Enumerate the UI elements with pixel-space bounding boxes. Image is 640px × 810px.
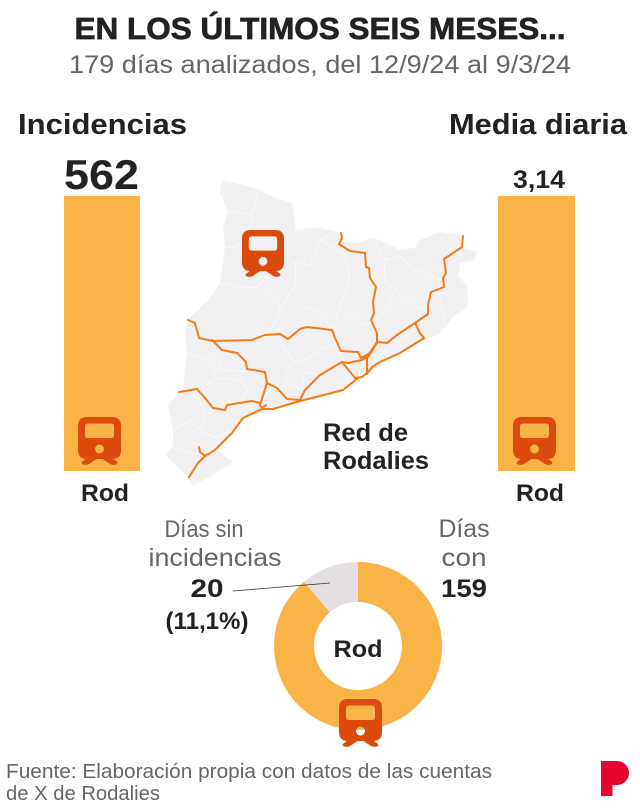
donut: días con incidencias — [274, 562, 442, 730]
icon: map train — [242, 230, 284, 277]
bar label: Rod — [81, 480, 129, 507]
bar: Rod media — [498, 196, 575, 471]
map: red de Rodalies — [165, 180, 477, 485]
map: rail lines — [179, 233, 463, 477]
label: días sin incidencias — [148, 516, 282, 635]
heading: media diaria: Media diaria — [449, 109, 628, 141]
label: días sin incidencias: 20 — [190, 575, 224, 603]
panel: media diaria — [449, 109, 628, 507]
source note: Fuente: Elaboración propia con datos de las cuentas — [6, 761, 492, 783]
label: días sin incidencias: (11,1%) — [166, 608, 248, 635]
donut chart — [274, 562, 442, 747]
map label — [323, 419, 429, 475]
source note — [6, 761, 492, 805]
label: días con: Días — [438, 515, 490, 543]
logo — [601, 761, 629, 796]
donut center label: Rod — [334, 636, 382, 663]
source note: de X de Rodalies — [6, 783, 160, 805]
map: comarca borders — [173, 189, 445, 455]
label: días con: 159 — [441, 575, 487, 603]
title: EN LOS ÚLTIMOS SEIS MESES... — [74, 10, 566, 46]
label: días con: con — [442, 544, 486, 572]
map label: Red de — [323, 419, 408, 447]
map label: Rodalies — [323, 447, 429, 475]
value: 562: 562 — [64, 151, 139, 198]
label: días con — [438, 515, 490, 603]
icon: train — [339, 699, 382, 747]
bar label: Rod — [516, 480, 564, 507]
icon: train — [513, 417, 556, 465]
map base: Catalunya — [165, 180, 477, 485]
label: días sin incidencias: incidencias — [148, 544, 282, 572]
bar: Rod incidencias — [64, 196, 140, 471]
panel: incidencias — [18, 109, 187, 507]
heading: incidencias: Incidencias — [18, 109, 187, 141]
value: 3,14: 3,14 — [513, 166, 565, 194]
label: días sin incidencias: Días sin — [164, 516, 244, 543]
leader line — [233, 583, 330, 591]
icon: train — [78, 417, 121, 465]
subtitle: 179 días analizados, del 12/9/24 al 9/3/24 — [69, 51, 571, 79]
donut: días sin incidencias — [304, 562, 358, 612]
